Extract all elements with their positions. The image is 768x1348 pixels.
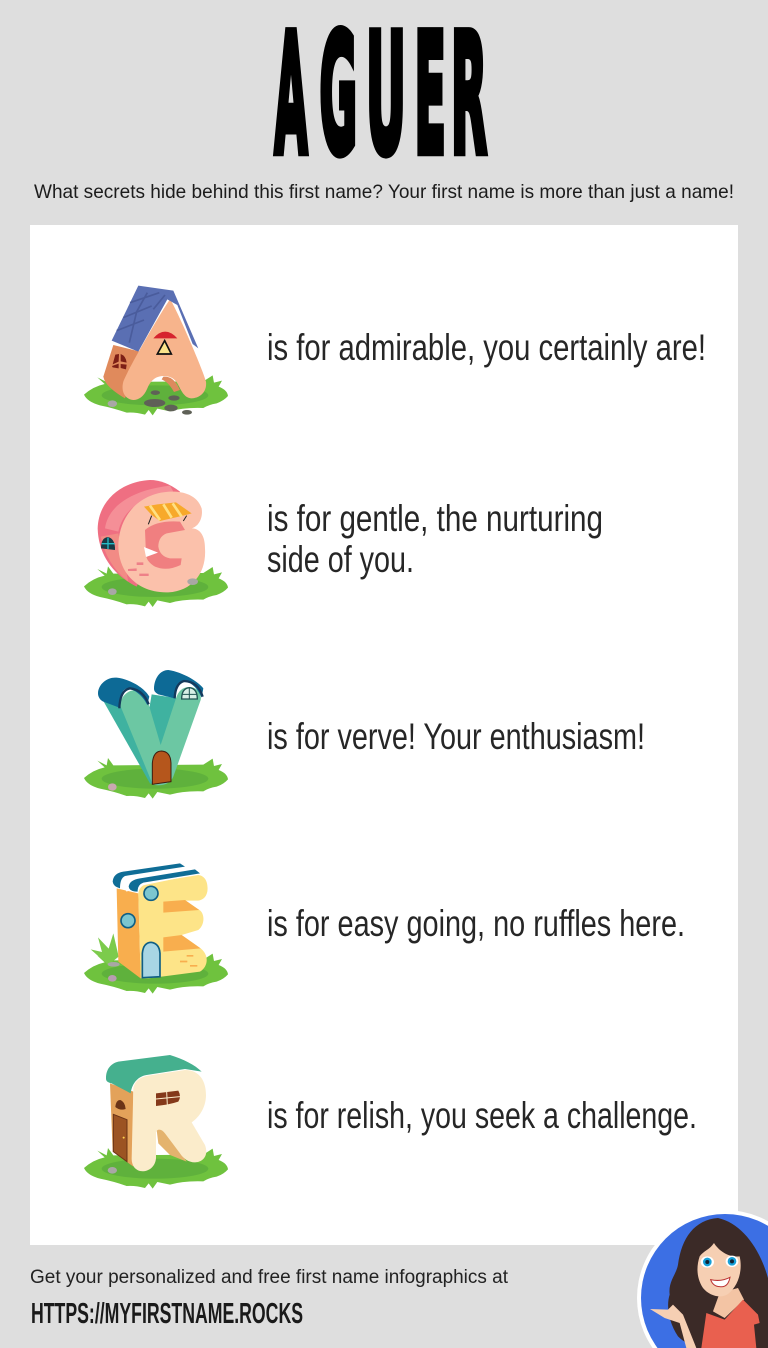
icon: letter R house	[84, 1055, 228, 1189]
face	[697, 1243, 741, 1296]
text: V: is for verve! Your enthusiasm!	[267, 716, 645, 757]
smile	[711, 1277, 730, 1287]
shirt	[701, 1300, 760, 1348]
title	[274, 0, 487, 191]
avatar	[637, 1210, 768, 1348]
neck	[713, 1288, 744, 1318]
subtitle: What secrets hide behind this first name? Your first name is more than just a name!	[34, 181, 734, 203]
arm and hand	[650, 1305, 696, 1348]
title: U	[366, 0, 406, 191]
title: R	[451, 1, 487, 191]
title: E	[414, 0, 446, 191]
text: G: is for gentle, the nurturing	[267, 498, 603, 539]
hair	[668, 1218, 768, 1348]
panel: letters	[30, 225, 738, 1245]
eyes	[701, 1256, 738, 1268]
text: G: side of you.	[267, 539, 414, 580]
icon: letter E house	[84, 863, 228, 994]
text: G	[267, 498, 603, 580]
title: G	[320, 0, 357, 191]
icon: letter G house	[84, 480, 228, 607]
footer url: HTTPS://MYFIRSTNAME.ROCKS	[31, 1298, 303, 1330]
icon: letter A house	[84, 286, 228, 415]
footer text: Get your personalized and free first name infographics at	[30, 1267, 509, 1288]
title: A	[274, 1, 308, 191]
icon: letter V house	[84, 670, 228, 799]
